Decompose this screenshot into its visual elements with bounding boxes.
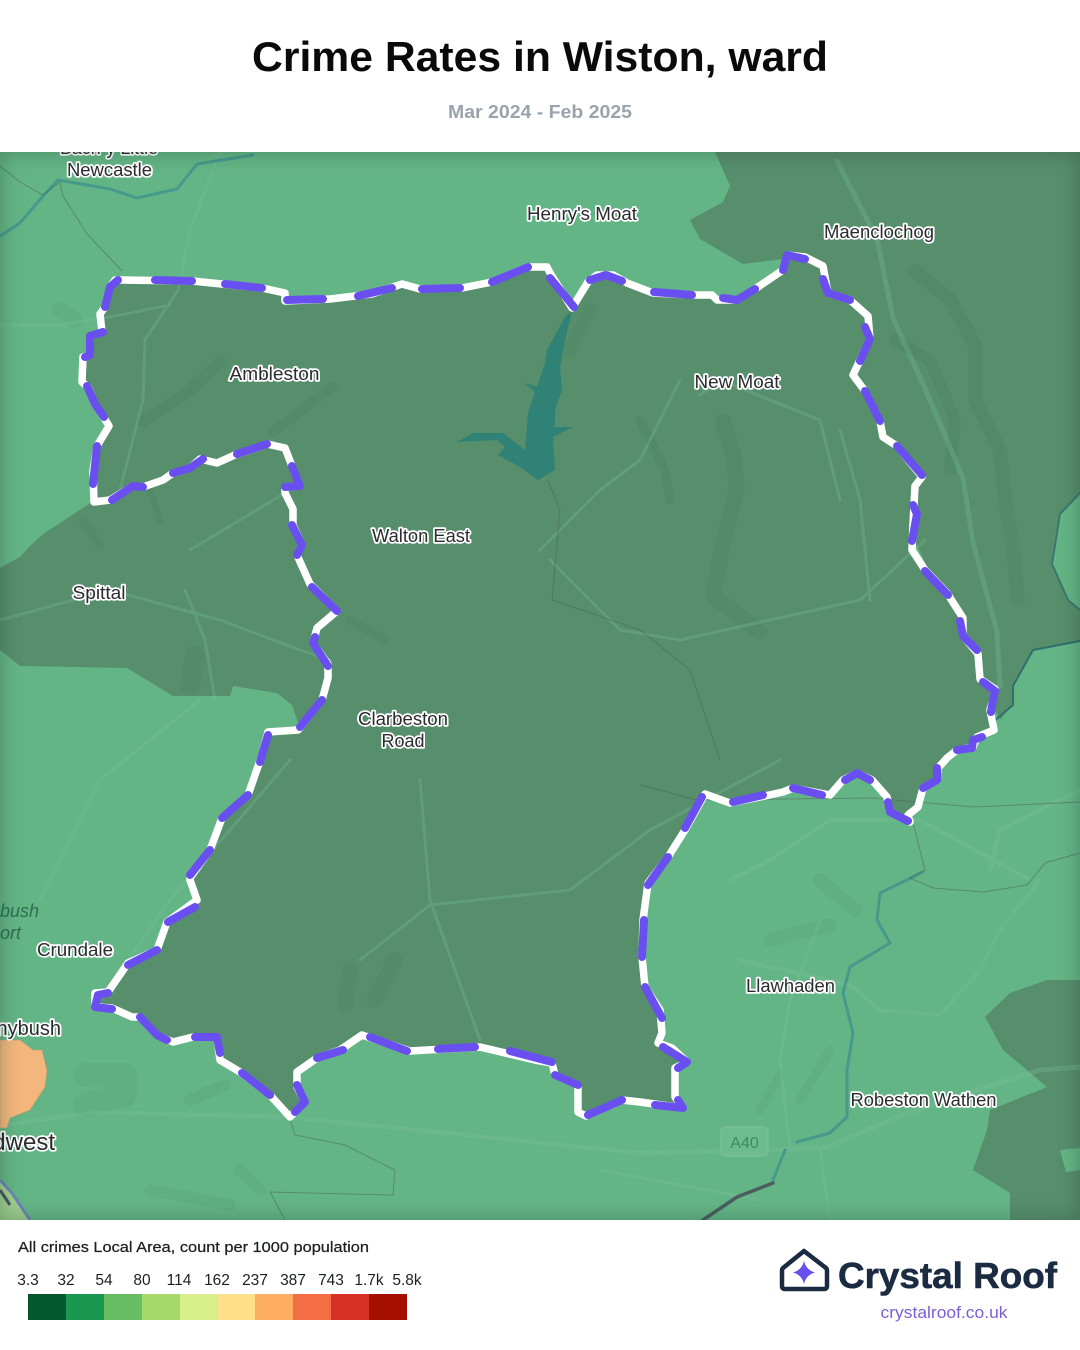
reservoir xyxy=(457,311,573,480)
place labels: New Moat xyxy=(694,372,780,392)
thin boundary lines xyxy=(0,166,1080,1220)
place labels: Walton East xyxy=(372,526,470,546)
park label: italic green: ort xyxy=(0,923,22,943)
legend scale labels: 114 xyxy=(167,1272,192,1289)
url: crystalroof.co.uk xyxy=(880,1304,1008,1322)
legend scale labels: 162 xyxy=(204,1272,230,1289)
icon: house with sparkle xyxy=(782,1251,827,1289)
legend scale labels: 54 xyxy=(95,1272,113,1289)
neighbouring area: Haverfordwest (orange) xyxy=(0,1040,47,1128)
legend title: All crimes Local Area, count per 1000 population xyxy=(18,1239,369,1256)
legend scale labels: 387 xyxy=(280,1272,306,1289)
subtitle: date range: Mar 2024 - Feb 2025 xyxy=(448,102,632,122)
estuary bottom-left xyxy=(0,1180,30,1220)
legend scale labels: 80 xyxy=(133,1272,151,1289)
place labels: Newcastle xyxy=(67,160,152,180)
legend scale labels: 743 xyxy=(318,1272,344,1289)
ward boundary: white line xyxy=(82,255,995,1117)
woodland on light green xyxy=(60,310,855,1205)
place labels: Maenclochog xyxy=(824,222,934,242)
legend scale labels: 1.7k xyxy=(354,1272,384,1289)
place labels: Bach-y Little xyxy=(60,138,158,158)
logo: Crystal Roof xyxy=(782,1251,1058,1322)
valleys and woodland xyxy=(83,271,1018,1005)
place labels: Llawhaden xyxy=(746,976,835,996)
park label: italic green: bush xyxy=(0,901,39,921)
park label: italic green xyxy=(0,904,38,939)
place labels: Road xyxy=(382,731,424,751)
legend xyxy=(17,1239,422,1320)
place labels: Ambleston xyxy=(230,364,320,384)
place labels xyxy=(0,138,996,1156)
legend scale labels: 237 xyxy=(242,1272,268,1289)
choropleth: darker neighbouring areas xyxy=(0,152,1080,1220)
place labels: Clarbeston xyxy=(358,709,448,729)
roads xyxy=(0,158,1080,1075)
place labels: Robeston Wathen xyxy=(850,1090,996,1110)
road shield: A40: A40 xyxy=(730,1135,759,1152)
choropleth: Wiston ward xyxy=(82,255,995,1117)
wordmark: Crystal Roof xyxy=(838,1255,1058,1296)
legend scale labels: 32 xyxy=(57,1272,75,1289)
legend scale labels: 3.3 xyxy=(17,1272,39,1289)
road shield: A40 xyxy=(721,1127,768,1156)
light enclave xyxy=(1060,1148,1080,1172)
ward boundary: purple dashes xyxy=(85,255,995,1115)
title: Crime Rates in Wiston, ward xyxy=(252,33,828,80)
legend scale labels: 5.8k xyxy=(392,1272,422,1289)
rivers xyxy=(0,155,1080,1220)
place labels: Crundale xyxy=(37,940,113,960)
place labels: Spittal xyxy=(72,583,126,603)
legend scale labels xyxy=(17,1272,422,1289)
place labels: Henry's Moat xyxy=(527,204,637,224)
legend colour bar xyxy=(28,1294,407,1320)
